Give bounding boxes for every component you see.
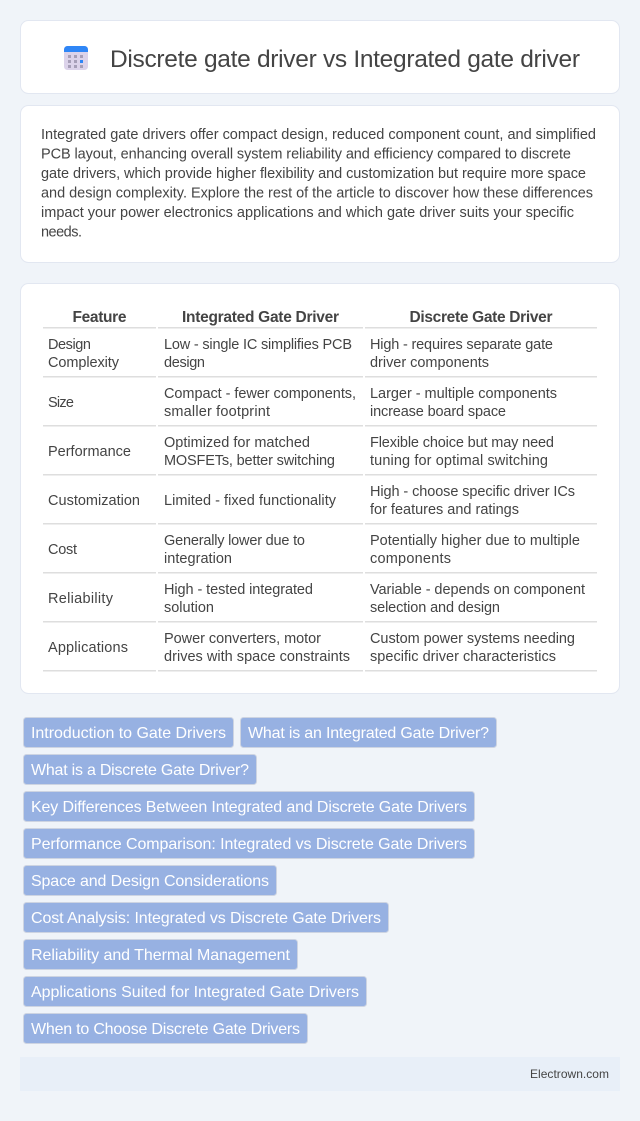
row: size: increase board space	[370, 404, 506, 420]
row: customization: Limited - fixed functionality	[164, 493, 337, 509]
row: size: Size	[48, 395, 74, 411]
chip: space and design	[24, 866, 276, 896]
text block: intro: impact your power electronics applications and which gate driver suits your specific	[41, 205, 574, 221]
row: size: smaller footprint	[164, 404, 270, 420]
table header	[72, 309, 552, 326]
chip: introduction	[24, 718, 234, 748]
row: design complexity: Low - single IC simplifies PCB	[164, 337, 352, 353]
table header: Feature	[72, 309, 127, 326]
chip: performance comparison	[24, 828, 474, 858]
chip: reliability	[24, 940, 298, 970]
chip: space and design: Space and Design Considerations	[31, 873, 269, 890]
chip: when to choose: When to Choose Discrete Gate Drivers	[31, 1021, 300, 1038]
row: cost	[48, 533, 580, 567]
row: reliability: Variable - depends on component	[370, 582, 585, 598]
row: performance: Optimized for matched	[164, 435, 310, 451]
chip: cost analysis: Cost Analysis: Integrated vs Discrete Gate Drivers	[31, 910, 381, 927]
chip: discrete definition: What is a Discrete Gate Driver?	[31, 762, 249, 779]
chip: key differences	[24, 792, 474, 822]
table header: Integrated Gate Driver	[182, 309, 339, 326]
text block: intro: Integrated gate drivers offer compact design, reduced component count, and simplified	[41, 127, 596, 143]
row: design complexity: driver components	[370, 355, 489, 371]
footer: Electrown.com	[530, 1067, 609, 1081]
chip: cost analysis	[24, 902, 388, 932]
row: applications: Power converters, motor	[164, 631, 321, 647]
row: cost: components	[370, 551, 451, 567]
row: reliability: High - tested integrated	[164, 582, 313, 598]
footer	[20, 1057, 620, 1091]
row: customization: High - choose specific driver ICs	[370, 484, 575, 500]
chip: discrete definition	[24, 754, 256, 784]
table header: Discrete Gate Driver	[410, 309, 552, 326]
title: Discrete gate driver vs Integrated gate driver	[110, 46, 580, 73]
row: reliability	[48, 582, 585, 616]
row: applications: specific driver characteristics	[370, 649, 556, 665]
row: performance: Flexible choice but may need	[370, 435, 554, 451]
row: reliability: solution	[164, 600, 214, 616]
chip: integrated definition: What is an Integrated Gate Driver?	[248, 725, 489, 742]
row: reliability: selection and design	[370, 600, 500, 616]
chip: performance comparison: Performance Comparison: Integrated vs Discrete Gate Drivers	[31, 836, 467, 853]
row: size	[48, 386, 557, 420]
table of contents chips	[24, 718, 496, 1044]
row: applications	[48, 631, 575, 665]
row: cost: Generally lower due to	[164, 533, 305, 549]
row: size: Larger - multiple components	[370, 386, 557, 402]
row: customization: for features and ratings	[370, 502, 519, 518]
chip: reliability: Reliability and Thermal Management	[31, 947, 291, 964]
row: applications: Applications	[48, 640, 128, 656]
row: design complexity: design	[164, 355, 205, 371]
row: customization: Customization	[48, 493, 140, 509]
row: cost: integration	[164, 551, 232, 567]
row: customization	[48, 484, 575, 518]
text block: intro: gate drivers, which provide higher flexibility and customization but require more space	[41, 166, 586, 182]
text block: intro: and design complexity. Explore the rest of the article to discover how these differences	[41, 186, 593, 202]
chip: when to choose	[24, 1014, 308, 1044]
row: performance	[48, 435, 554, 469]
row: performance: Performance	[48, 444, 131, 460]
row: performance: MOSFETs, better switching	[164, 453, 335, 469]
row: reliability: Reliability	[48, 591, 114, 607]
text block: intro: needs.	[41, 224, 82, 240]
chip: key differences: Key Differences Between Integrated and Discrete Gate Drivers	[31, 799, 467, 816]
row: design complexity: Design	[48, 337, 91, 353]
row: size: Compact - fewer components,	[164, 386, 356, 402]
panel: comparison table	[20, 284, 620, 694]
panel: title header	[20, 20, 620, 94]
row: design complexity: High - requires separate gate	[370, 337, 553, 353]
chip: integrated definition	[240, 718, 496, 748]
row: applications: Custom power systems needing	[370, 631, 575, 647]
row: design complexity	[48, 337, 553, 371]
chip: introduction: Introduction to Gate Drivers	[31, 725, 226, 742]
row: design complexity: Complexity	[48, 355, 120, 371]
panel: intro paragraph	[20, 106, 620, 262]
chip: applications	[24, 976, 366, 1006]
row: cost: Cost	[48, 542, 77, 558]
text block: intro: PCB layout, enhancing overall system reliability and efficiency compared to discrete	[41, 146, 571, 162]
row: applications: drives with space constraints	[164, 649, 350, 665]
icon: calendar grid	[64, 46, 88, 70]
text block: intro	[41, 127, 596, 240]
row: cost: Potentially higher due to multiple	[370, 533, 580, 549]
row: performance: tuning for optimal switching	[370, 453, 548, 469]
chip: applications: Applications Suited for Integrated Gate Drivers	[31, 984, 359, 1001]
